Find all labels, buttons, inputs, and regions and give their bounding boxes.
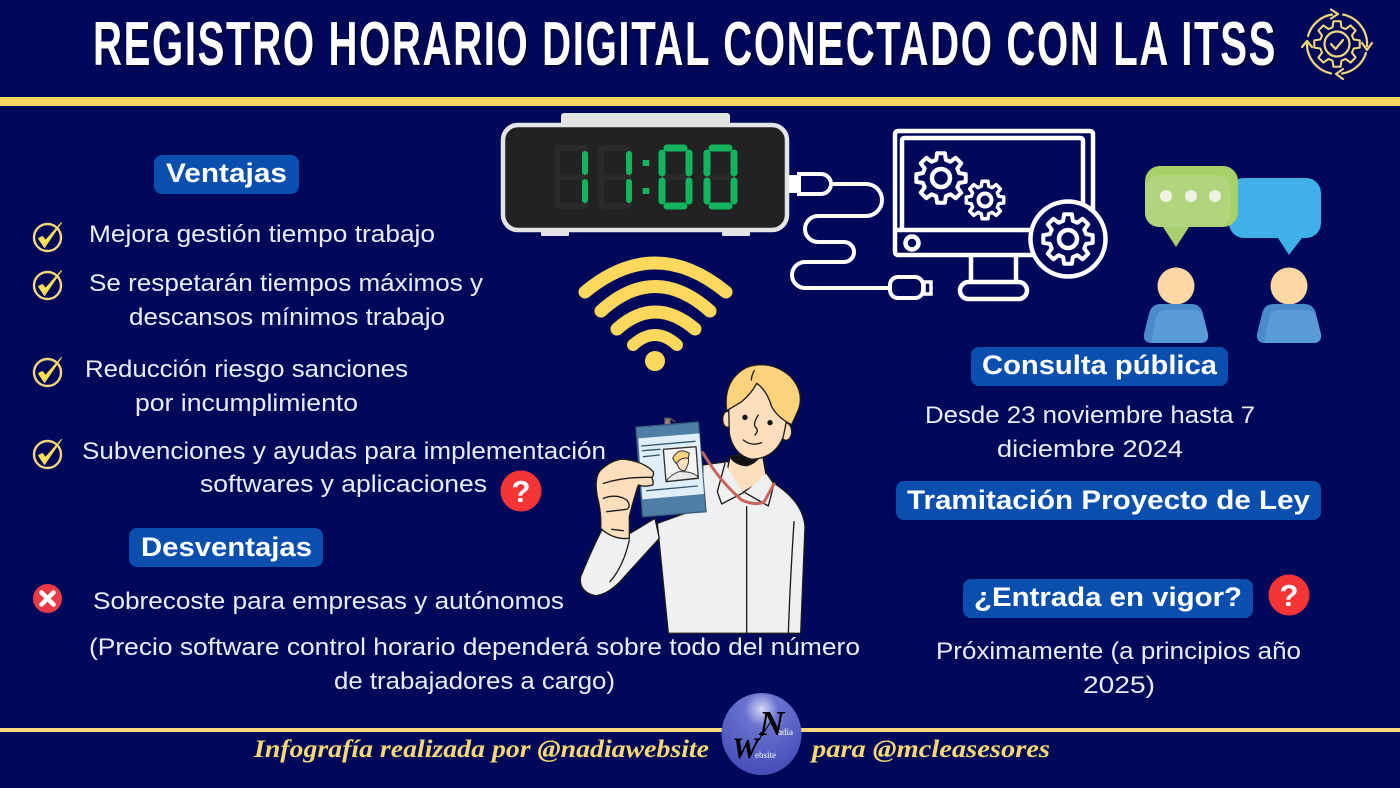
- panel: entrada en vigor: [936, 574, 1310, 699]
- entrada date: 2025): [1083, 672, 1155, 699]
- ears: [723, 411, 732, 427]
- heading: tramitacion proyecto de ley: Tramitación Proyecto de Ley: [907, 485, 1310, 515]
- footer credit left: Infografía realizada por @nadiawebsite: [253, 736, 709, 763]
- panel: consulta publica: [925, 347, 1255, 463]
- blue bubble: [1229, 178, 1321, 255]
- sleeve: [580, 518, 659, 596]
- icon: red question mark: ?: [512, 474, 530, 509]
- item: subvenciones: [34, 438, 606, 498]
- consulta dates: Desde 23 noviembre hasta 7: [925, 402, 1255, 429]
- logo: nadia website: W: [732, 732, 761, 765]
- item: tiempos maximos: [34, 270, 483, 331]
- person right: [1257, 268, 1321, 343]
- top divider: [0, 97, 1400, 106]
- entrada date: [936, 638, 1301, 699]
- panel: ventajas: [34, 155, 606, 512]
- heading: entrada en vigor: [963, 579, 1253, 618]
- neck: [725, 450, 767, 494]
- entrada date: Próximamente (a principios año: [936, 638, 1301, 665]
- computer monitor with gears: [895, 131, 1106, 299]
- item: mejora gestion: Mejora gestión tiempo trabajo: [89, 221, 435, 248]
- shirt: [657, 462, 805, 633]
- clock ghost digits: [557, 148, 734, 206]
- heading: tramitacion proyecto de ley: [896, 481, 1321, 520]
- icon: red cross: [33, 584, 62, 613]
- icon: wifi: [585, 263, 726, 371]
- icon: gear with check and cycle arrows: [1302, 10, 1372, 79]
- item: sobrecoste: Sobrecoste para empresas y autónomos: [93, 588, 564, 615]
- item: subvenciones: softwares y aplicaciones: [200, 471, 487, 498]
- heading: consulta publica: [971, 347, 1228, 386]
- panel: desventajas: [33, 528, 860, 695]
- heading: ventajas: [154, 155, 299, 194]
- item: reduccion riesgo: por incumplimiento: [135, 390, 358, 417]
- icon: small gear: [966, 181, 1004, 219]
- item: tiempos maximos: Se respetarán tiempos máximos y: [89, 270, 483, 297]
- badge clip: [665, 418, 675, 428]
- digital clock: [503, 113, 787, 236]
- item: subvenciones: Subvenciones y ayudas para implementación: [82, 438, 606, 465]
- icon: people talking: [1144, 166, 1321, 343]
- footer credit right: para @mcleasesores: [810, 736, 1050, 763]
- heading: desventajas: [129, 528, 323, 567]
- note: precio software: [89, 634, 860, 695]
- collar: [717, 463, 774, 506]
- illustration: man holding id badge: [580, 365, 805, 633]
- consulta dates: [925, 402, 1255, 463]
- item: reduccion riesgo: [34, 356, 408, 417]
- item: reduccion riesgo: Reducción riesgo sanciones: [85, 356, 408, 383]
- hand: [596, 459, 653, 539]
- usb cable: [791, 174, 931, 298]
- icon: red question mark: [1268, 574, 1310, 616]
- consulta dates: diciembre 2024: [997, 436, 1183, 463]
- icon: red question mark: [500, 470, 542, 512]
- neck shadow: [729, 455, 759, 466]
- icon: red question mark: ?: [1280, 578, 1298, 613]
- heading: consulta publica: Consulta pública: [982, 350, 1218, 380]
- face: [729, 380, 788, 459]
- clock time 11:00: [585, 148, 734, 206]
- note: precio software: (Precio software control horario dependerá sobre todo del número: [89, 634, 860, 661]
- hair: [726, 365, 800, 425]
- heading: ventajas: Ventajas: [166, 158, 287, 188]
- logo: nadia website: N: [758, 704, 786, 743]
- heading: desventajas: Desventajas: [141, 532, 312, 562]
- eyes and mouth: [742, 415, 748, 420]
- icon: circled gear: [1030, 202, 1106, 276]
- icon: large gear: [916, 153, 966, 203]
- id badge: [636, 422, 706, 517]
- item: tiempos maximos: descansos mínimos trabajo: [129, 304, 445, 331]
- heading: entrada en vigor: ¿Entrada en vigor?: [974, 582, 1242, 612]
- green bubble: [1145, 166, 1238, 247]
- logo: nadia website: ebsite: [755, 750, 776, 760]
- footer line: [0, 728, 1400, 732]
- note: precio software: de trabajadores a cargo): [334, 668, 615, 695]
- logo: nadia website: [722, 693, 802, 775]
- lanyard: [703, 453, 774, 504]
- person left: [1144, 268, 1208, 343]
- logo: nadia website: adia: [778, 727, 793, 737]
